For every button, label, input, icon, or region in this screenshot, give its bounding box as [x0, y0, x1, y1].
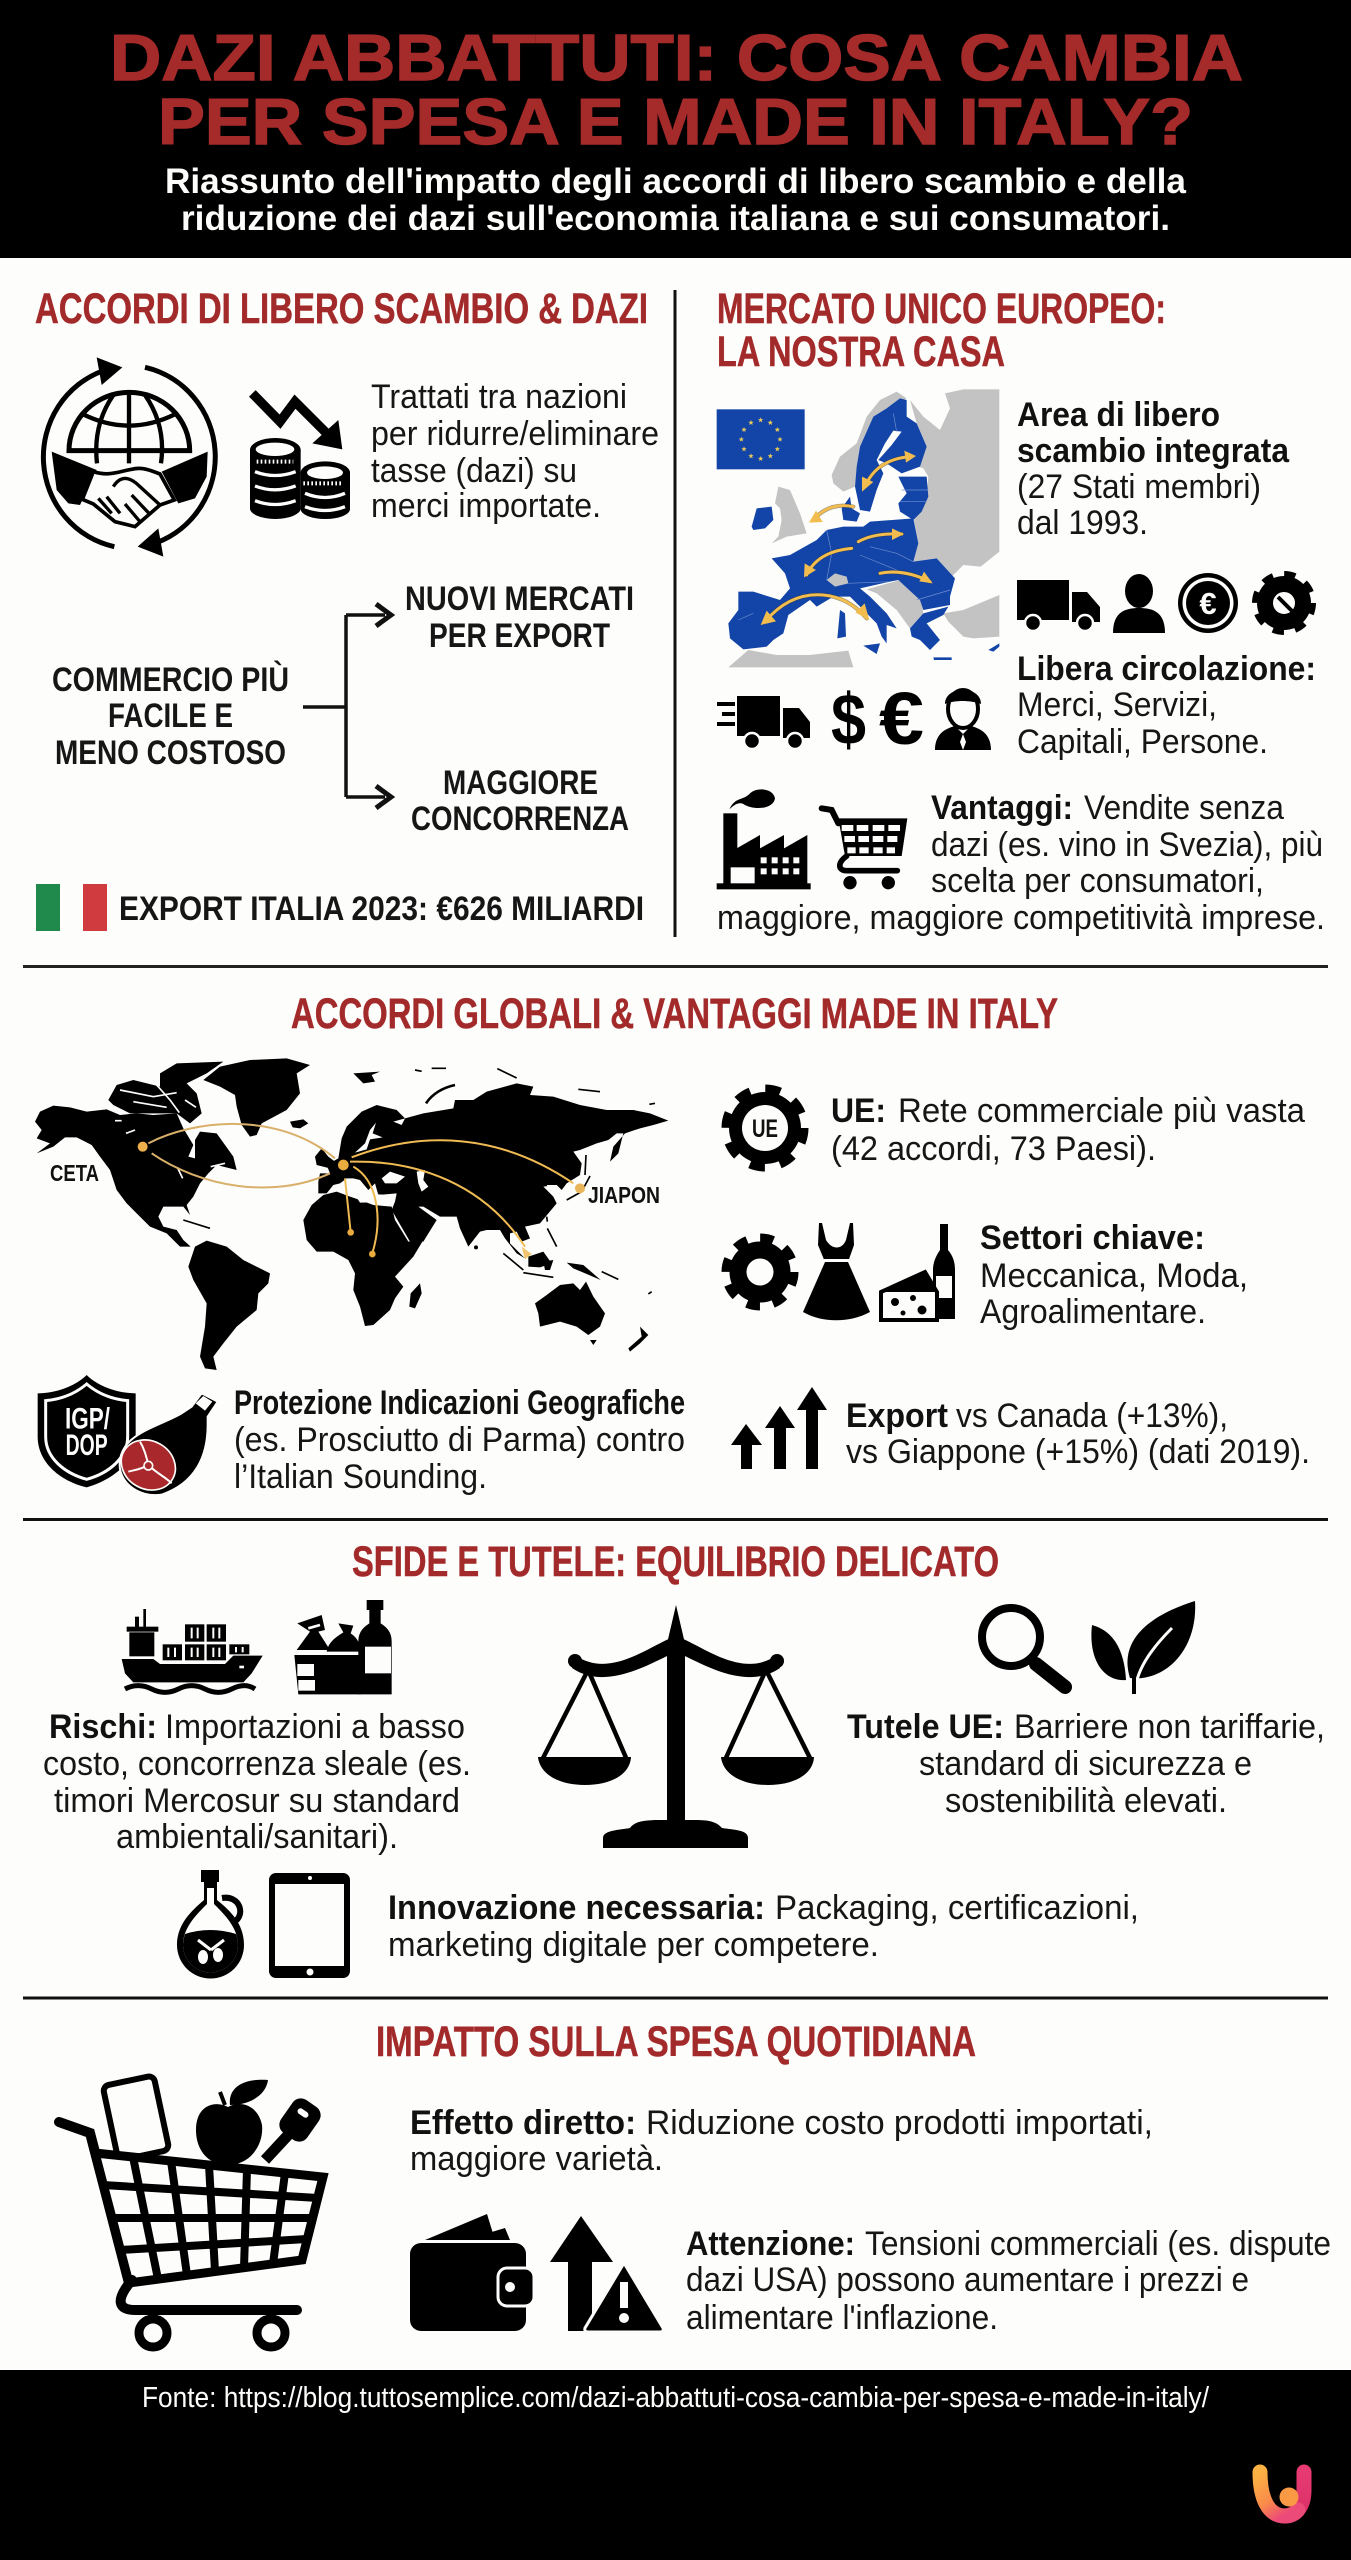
- label: commercio più facile: FACILE E: [108, 697, 233, 735]
- text: area di libero scambio: Area di libero: [1017, 396, 1220, 434]
- text: rischi: timori Mercosur su standard: [54, 1782, 460, 1820]
- text: vantaggi: Vendite senza: [1084, 789, 1284, 827]
- label: CETA: CETA: [50, 1160, 99, 1186]
- text: trattati: tasse (dazi) su: [371, 452, 577, 490]
- text: attenzione: alimentare l'inflazione.: [686, 2299, 998, 2337]
- icon: wallet: [410, 2214, 534, 2331]
- text: rischi: Rischi:: [49, 1708, 157, 1746]
- icon: cheese and wine: [881, 1224, 955, 1320]
- heading: mercato unico: LA NOSTRA CASA: [717, 328, 1005, 376]
- icon: shopping cart small: [822, 808, 907, 889]
- icon: UE gear: UE: [752, 1115, 778, 1143]
- text: vantaggi: dazi (es. vino in Svezia), più: [931, 826, 1323, 864]
- text: tutele UE: Tutele UE:: [847, 1708, 1004, 1746]
- stat: export italia: EXPORT ITALIA 2023: €626 MILIARDI: [119, 890, 644, 928]
- icon: euro: €: [879, 677, 924, 760]
- source text: Fonte: https://blog.tuttosemplice.com/dazi-abbattuti-cosa-cambia-per-spesa-e-made-in-italy/: [142, 2382, 1210, 2414]
- text: vantaggi: scelta per consumatori,: [931, 862, 1264, 900]
- text: UE rete: [831, 1092, 1305, 1168]
- label: maggiore concorrenza: [411, 764, 629, 838]
- icon: groceries: [294, 1600, 392, 1694]
- label: nuovi mercati: [405, 580, 634, 655]
- text: protezione IG: (es. Prosciutto di Parma) contro: [234, 1421, 685, 1459]
- icon: price up warning: [550, 2216, 663, 2332]
- icon: globe and handshake: [43, 357, 215, 557]
- subtitle: Riassunto dell'impatto degli accordi di libero scambio e della: [165, 162, 1187, 201]
- text: protezione IG: l’Italian Sounding.: [234, 1458, 487, 1496]
- icon: IGP DOP shield: [38, 1375, 136, 1487]
- icon: olive oil bottle: [177, 1870, 244, 1978]
- text: trattati: Trattati tra nazioni: [371, 378, 627, 416]
- text: libera circolazione: Libera circolazione:: [1017, 650, 1316, 688]
- text: effetto diretto: [410, 2104, 1153, 2178]
- text: tutele UE: sostenibilità elevati.: [945, 1782, 1227, 1820]
- label: maggiore concorrenza: MAGGIORE: [443, 764, 598, 802]
- text: area di libero scambio: scambio integrata: [1017, 432, 1290, 470]
- text: innovazione: Packaging, certificazioni,: [775, 1889, 1139, 1927]
- icon: leaf: [1091, 1601, 1195, 1694]
- icon: euro coin: €: [1199, 586, 1217, 621]
- icon: factory: [717, 789, 811, 889]
- text: attenzione: Tensioni commerciali (es. dispute: [865, 2225, 1331, 2263]
- text: export vs: vs Giappone (+15%) (dati 2019).: [846, 1433, 1310, 1471]
- icon: falling arrow and coins: [250, 393, 350, 519]
- icon: gear with wrench: [1257, 576, 1311, 630]
- icon: UE gear: [728, 1091, 802, 1165]
- icon: gear mechanics: [727, 1239, 793, 1305]
- text: settori chiave: Agroalimentare.: [980, 1293, 1206, 1331]
- icon: magnifier: [982, 1608, 1065, 1687]
- icon: big shopping cart: [59, 2075, 325, 2347]
- icon: dress: [803, 1223, 870, 1320]
- header band: [0, 0, 1351, 258]
- icon: person: [1113, 574, 1165, 633]
- subtitle: [165, 162, 1187, 238]
- heading: sfide e tutele: SFIDE E TUTELE: EQUILIBRIO DELICATO: [352, 1538, 999, 1586]
- label: maggiore concorrenza: CONCORRENZA: [411, 800, 629, 838]
- text: export vs: [846, 1397, 1310, 1471]
- text: vantaggi: maggiore, maggiore competitività imprese.: [717, 899, 1325, 937]
- icon: fast truck: [717, 696, 810, 749]
- subtitle: riduzione dei dazi sull'economia italiana e sui consumatori.: [181, 199, 1170, 238]
- icon: euro coin: [1178, 573, 1238, 633]
- heading: impatto sulla spesa: IMPATTO SULLA SPESA QUOTIDIANA: [376, 2018, 976, 2066]
- text: attenzione: [686, 2225, 1331, 2337]
- label: JIAPON: JIAPON: [588, 1182, 660, 1208]
- title: PER SPESA E MADE IN ITALY?: [158, 85, 1193, 158]
- text: settori chiave: [980, 1219, 1248, 1331]
- text: effetto diretto: maggiore varietà.: [410, 2140, 663, 2178]
- text: vantaggi: [717, 789, 1325, 937]
- arrow: branching connector: [303, 604, 391, 808]
- heading: accordi di libero scambio: ACCORDI DI LIBERO SCAMBIO & DAZI: [35, 285, 648, 333]
- text: innovazione: Innovazione necessaria:: [388, 1889, 765, 1927]
- text: trattati: merci importate.: [371, 487, 601, 525]
- footer band: [0, 2370, 1351, 2560]
- text: libera circolazione: [1017, 650, 1316, 761]
- text: UE rete: Rete commerciale più vasta: [898, 1092, 1305, 1130]
- text: innovazione: marketing digitale per competere.: [388, 1926, 879, 1964]
- icon: italian flag: [36, 884, 107, 931]
- diagram: commercio: [52, 580, 634, 838]
- logo: [1260, 2472, 1304, 2516]
- text: area di libero scambio: [1017, 396, 1290, 542]
- icon: balance scale: [538, 1605, 814, 1848]
- icon: container ship: [122, 1609, 263, 1692]
- text: trattati: [371, 378, 659, 525]
- text: attenzione: Attenzione:: [686, 2225, 855, 2263]
- text: tutele UE: [847, 1708, 1325, 1820]
- icon: prosciutto: [112, 1393, 218, 1500]
- text: libera circolazione: Merci, Servizi,: [1017, 686, 1217, 724]
- text: trattati: per ridurre/eliminare: [371, 415, 659, 453]
- text: area di libero scambio: (27 Stati membri): [1017, 468, 1261, 506]
- eurasia africa oceania: [303, 1068, 668, 1352]
- text: attenzione: dazi USA) possono aumentare i prezzi e: [686, 2261, 1249, 2299]
- text: UE rete: UE:: [831, 1092, 886, 1130]
- text: rischi: [43, 1708, 471, 1856]
- text: tutele UE: Barriere non tariffarie,: [1014, 1708, 1325, 1746]
- label: commercio più facile: COMMERCIO PIÙ: [52, 661, 289, 699]
- text: export vs: vs Canada (+13%),: [956, 1397, 1228, 1435]
- text: libera circolazione: Capitali, Persone.: [1017, 723, 1268, 761]
- text: vantaggi: Vantaggi:: [931, 789, 1073, 827]
- icon: IGP DOP shield: IGP/: [65, 1402, 110, 1435]
- text: rischi: costo, concorrenza sleale (es.: [43, 1745, 471, 1783]
- arcs: trade routes: [138, 1124, 585, 1259]
- text: area di libero scambio: dal 1993.: [1017, 504, 1148, 542]
- text: protezione IG: [234, 1384, 685, 1496]
- text: effetto diretto: Effetto diretto:: [410, 2104, 636, 2142]
- icon: business person: [935, 690, 991, 750]
- text: UE rete: (42 accordi, 73 Paesi).: [831, 1130, 1156, 1168]
- label: nuovi mercati: PER EXPORT: [429, 617, 610, 655]
- icon: rising arrows: [731, 1387, 827, 1469]
- text: effetto diretto: Riduzione costo prodotti importati,: [646, 2104, 1153, 2142]
- icon: truck: [1017, 580, 1100, 631]
- map: Europe: [728, 389, 999, 667]
- label: commercio più facile: MENO COSTOSO: [55, 734, 286, 772]
- text: settori chiave: Meccanica, Moda,: [980, 1257, 1248, 1295]
- label: nuovi mercati: NUOVI MERCATI: [405, 580, 634, 618]
- text: settori chiave: Settori chiave:: [980, 1219, 1205, 1257]
- title: [110, 21, 1243, 158]
- label: commercio più facile: [52, 661, 289, 772]
- icon: tablet: [269, 1873, 350, 1978]
- icon: dollar: $: [831, 680, 866, 760]
- text: protezione IG: Protezione Indicazioni Geografiche: [234, 1384, 685, 1422]
- heading: mercato unico: MERCATO UNICO EUROPEO:: [717, 285, 1166, 333]
- icon: IGP DOP shield: DOP: [66, 1429, 108, 1462]
- text: innovazione: [388, 1889, 1139, 1964]
- icon: EU flag: [717, 409, 805, 469]
- heading: accordi globali: ACCORDI GLOBALI & VANTAGGI MADE IN ITALY: [291, 990, 1058, 1038]
- text: export vs: Export: [846, 1397, 948, 1435]
- text: tutele UE: standard di sicurezza e: [919, 1745, 1252, 1783]
- text: rischi: Importazioni a basso: [165, 1708, 465, 1746]
- text: rischi: ambientali/sanitari).: [116, 1818, 398, 1856]
- heading: mercato unico: [717, 285, 1166, 376]
- map: world: [35, 1058, 668, 1370]
- title: DAZI ABBATTUTI: COSA CAMBIA: [110, 21, 1243, 94]
- americas: [35, 1058, 335, 1370]
